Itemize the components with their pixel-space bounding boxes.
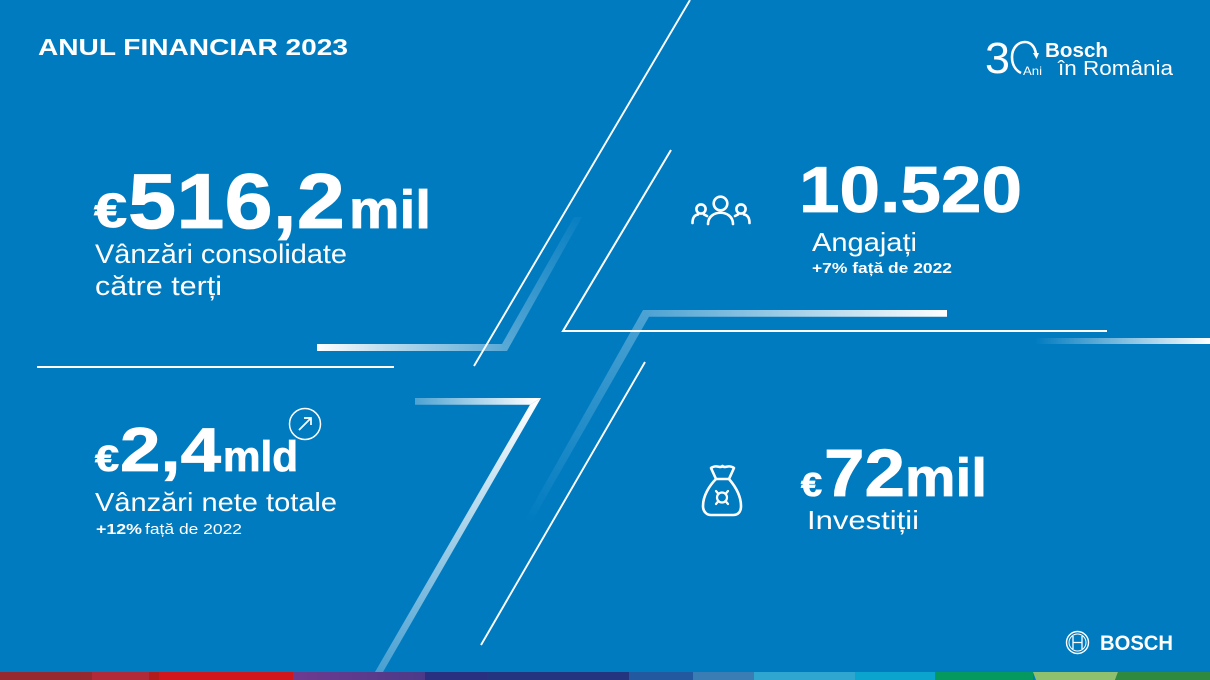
gradient band: right edge <box>1035 338 1210 344</box>
thin horizontal divider: left <box>37 366 394 368</box>
gradient band: under sales <box>317 217 582 351</box>
icon: up arrow circle <box>290 408 320 440</box>
stat: consolidated sales: Vânzări consolidate <box>95 239 347 269</box>
stat: total net sales: +12% <box>96 522 142 538</box>
logo: 30 ani Bosch in Romania: Bosch <box>1045 39 1108 62</box>
stat: consolidated sales: € <box>94 185 127 238</box>
stat: employees <box>799 153 1022 277</box>
stat: employees: 10.520 <box>799 153 1022 226</box>
stat: consolidated sales: 516,2 <box>128 157 345 245</box>
stat: investments <box>801 436 987 535</box>
thin line: angle under employees <box>563 150 1107 331</box>
colour stripe <box>0 672 1210 680</box>
stat: investments: 72 <box>824 436 905 511</box>
stat: investments: mil <box>905 448 987 508</box>
stat: total net sales: mld <box>223 433 298 481</box>
stat: total net sales: 2,4 <box>120 416 222 485</box>
stat: employees: +7% față de 2022 <box>812 261 952 277</box>
stat: consolidated sales <box>94 157 431 301</box>
stat: total net sales: € <box>95 438 119 479</box>
stat: total net sales <box>95 416 337 538</box>
stat: total net sales: Vânzări nete totale <box>95 487 337 517</box>
logo: 30 ani Bosch in Romania: în România <box>1057 58 1174 80</box>
logo: 30 ani Bosch in Romania: Ani <box>1023 64 1042 78</box>
icon: people <box>692 197 750 224</box>
logo: 30 ani Bosch in Romania <box>985 34 1174 83</box>
stat: consolidated sales: către terți <box>95 271 222 301</box>
logo: Bosch <box>1066 632 1173 655</box>
thin diagonal line: top centre <box>474 0 690 366</box>
thin diagonal line: lower centre <box>481 362 645 645</box>
icon: money bag <box>703 466 741 515</box>
gradient band: above employees rule <box>523 310 947 523</box>
stat: total net sales: față de 2022 <box>145 521 242 538</box>
stat: investments: € <box>801 466 822 503</box>
title: ANUL FINANCIAR 2023 <box>38 34 348 60</box>
logo: 30 ani Bosch in Romania: 3 <box>985 34 1010 83</box>
stat: employees: Angajați <box>812 227 917 257</box>
stat: investments: Investiții <box>807 505 919 535</box>
logo: Bosch: BOSCH <box>1100 632 1173 655</box>
gradient band: seven shape <box>375 398 541 672</box>
stat: consolidated sales: mil <box>349 180 431 240</box>
